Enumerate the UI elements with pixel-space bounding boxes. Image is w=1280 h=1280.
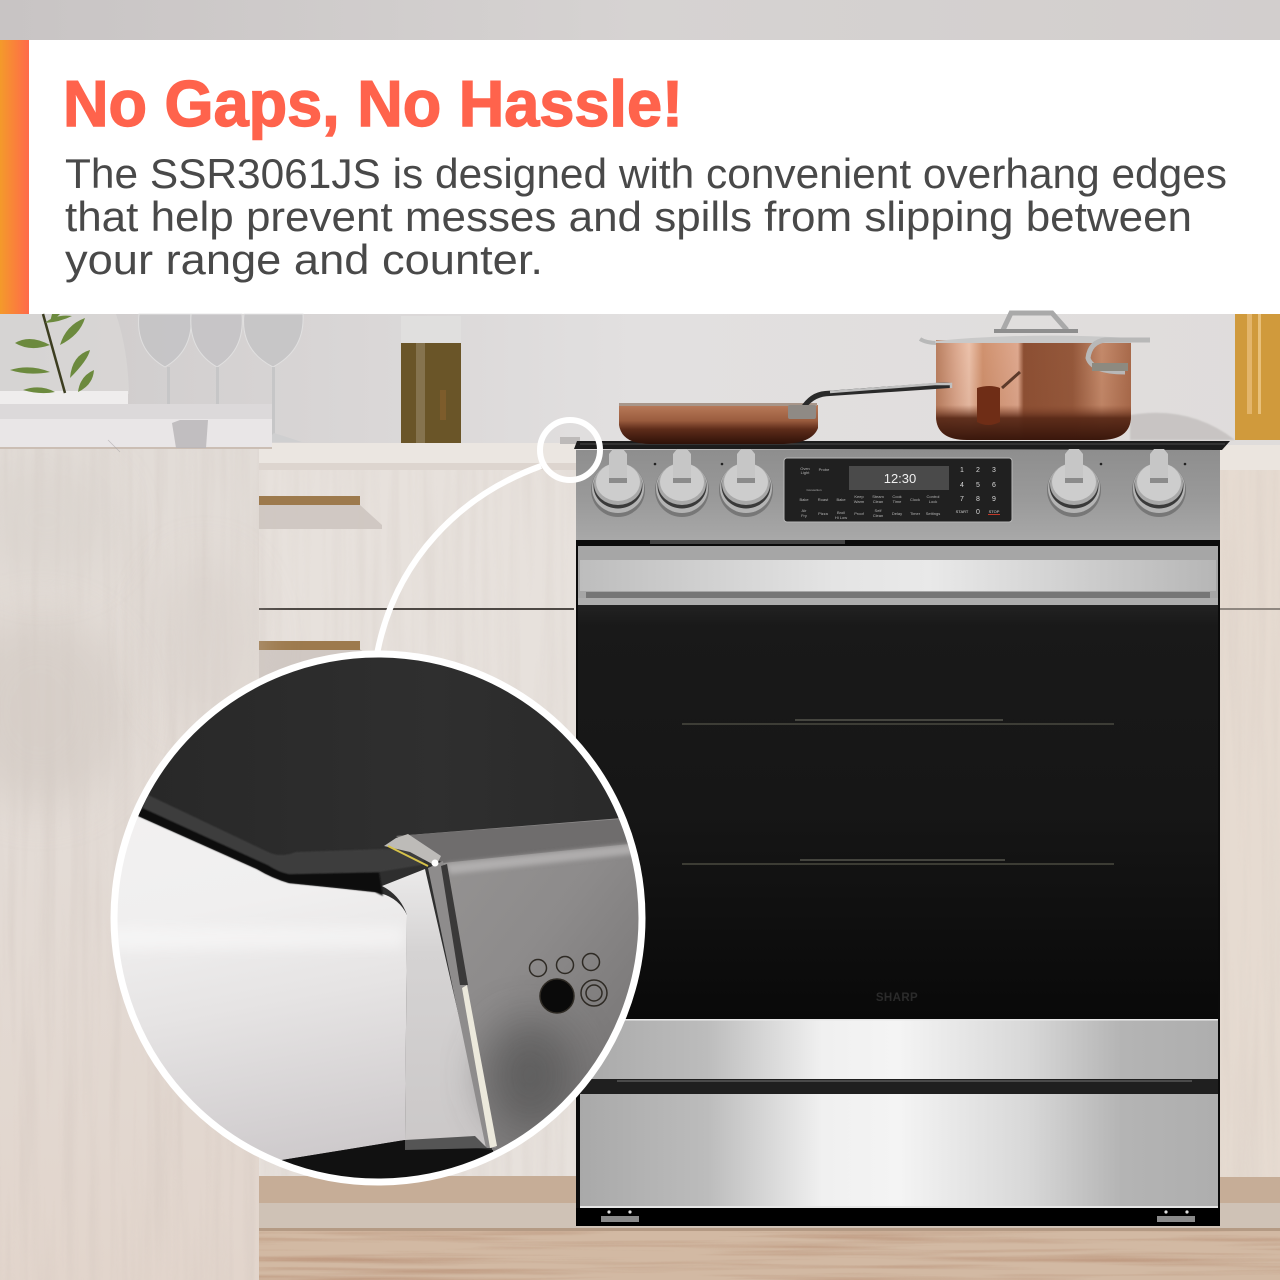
- oven door glass: [578, 605, 1218, 1019]
- black cooktop surface: [138, 658, 619, 1160]
- kitchen scene: [0, 314, 1280, 1280]
- marble strip: [0, 0, 1280, 40]
- keypad: 6: [992, 482, 996, 489]
- header panel: [0, 40, 1280, 314]
- control labels: Air: [802, 508, 807, 513]
- keypad: 5: [976, 482, 980, 489]
- vent holes: [530, 954, 607, 1013]
- middle countertop: [258, 443, 576, 470]
- keypad: 2: [976, 467, 980, 474]
- pan handle: [800, 382, 951, 408]
- brushed steel side: [396, 815, 660, 1155]
- control labels: [799, 466, 940, 520]
- chrome edge: [384, 834, 497, 1148]
- keypad: 7: [960, 496, 964, 503]
- pot reflection: [977, 372, 1020, 425]
- oven rack upper: [682, 720, 1114, 724]
- control labels: Broil: [837, 510, 845, 515]
- frying pan: [619, 382, 951, 444]
- wine glasses: [139, 314, 303, 442]
- pot body: [936, 340, 1131, 440]
- vent gap: [580, 1079, 1218, 1094]
- control labels: Light: [801, 470, 810, 475]
- oven door handle: [578, 540, 1218, 605]
- keypad: 0: [976, 509, 980, 516]
- control labels: Settings: [926, 511, 940, 516]
- control labels: Control: [927, 494, 940, 499]
- connector curve: [377, 466, 541, 654]
- steel drawer: [580, 1094, 1218, 1208]
- display panel: [784, 458, 1012, 522]
- wall: [0, 314, 1280, 454]
- keypad: START: [956, 509, 969, 514]
- drawer handle lower: [258, 641, 382, 690]
- pot: [920, 313, 1150, 440]
- control labels: Timer: [910, 511, 921, 516]
- control labels: Convection: [806, 488, 822, 492]
- control panel: [576, 450, 1220, 542]
- control labels: Oven: [800, 466, 810, 471]
- lens ground: [111, 651, 645, 1185]
- keypad: 1: [960, 467, 964, 474]
- pot handle right: [1088, 340, 1150, 372]
- lid: [935, 336, 1131, 343]
- keypad: [956, 467, 1000, 516]
- metal dark patch: [485, 1020, 575, 1130]
- body text: that help prevent messes and spills from slipping between: [65, 193, 1192, 240]
- pot handle left: [920, 339, 938, 343]
- control labels: Keep: [854, 494, 864, 499]
- control labels: Roast: [818, 497, 829, 502]
- oven rack lower: [682, 860, 1114, 864]
- right cabinet: [1220, 445, 1280, 1177]
- body text: [65, 150, 1227, 283]
- keypad: STOP: [989, 509, 1000, 514]
- keypad: 4: [960, 482, 964, 489]
- knobs: [591, 449, 1186, 517]
- base with feet: [576, 1208, 1220, 1226]
- body text: The SSR3061JS is designed with convenient overhang edges: [65, 150, 1227, 197]
- steel top band: [396, 819, 628, 863]
- brand: SHARP: [876, 992, 918, 1004]
- black base shadow: [282, 1140, 494, 1178]
- range: [560, 437, 1230, 1226]
- pot lid knob: [1003, 313, 1067, 330]
- steel panel upper: [579, 1019, 1218, 1079]
- control labels: Clock: [910, 497, 920, 502]
- cooktop: [560, 437, 1230, 450]
- control labels: Clean: [873, 513, 883, 518]
- magnified detail: [110, 650, 646, 1186]
- control labels: Warm: [854, 499, 865, 504]
- control labels: Bake: [836, 497, 846, 502]
- keypad: 3: [992, 467, 996, 474]
- clock display: [849, 466, 949, 490]
- steel highlight: [447, 842, 630, 875]
- lens ring: [114, 654, 642, 1182]
- control labels: Probe: [819, 467, 830, 472]
- control labels: Self: [875, 508, 882, 513]
- control labels: Bake: [799, 497, 809, 502]
- bottle: [401, 316, 461, 443]
- accent bar: [0, 40, 29, 314]
- control labels: Delay: [892, 511, 902, 516]
- counter side face: [382, 869, 489, 1147]
- control labels: Clean: [873, 499, 883, 504]
- wall shadow: [1130, 413, 1235, 440]
- body frame: [576, 540, 1220, 1226]
- callout ring: [540, 420, 600, 480]
- keypad: 9: [992, 496, 996, 503]
- marble counter slab: [0, 404, 272, 452]
- toe kick: [258, 1176, 1280, 1229]
- left cabinet: [0, 448, 259, 1280]
- counter highlight band: [315, 934, 394, 940]
- drawer handle upper: [258, 496, 382, 529]
- control labels: Cook: [892, 494, 902, 499]
- title: No Gaps, No Hassle!: [63, 67, 683, 140]
- cooktop bevel edge: [143, 794, 430, 874]
- cooktop shadow line: [136, 808, 383, 896]
- control labels: Pizza: [818, 511, 829, 516]
- amber bottle: [1235, 314, 1280, 440]
- control labels: Time: [893, 499, 902, 504]
- control labels: Lock: [929, 499, 937, 504]
- keypad: 8: [976, 496, 980, 503]
- middle cabinet: [258, 470, 576, 1176]
- clock display: 12:30: [884, 471, 916, 486]
- white counter block: [118, 816, 407, 1160]
- control labels: Proof: [854, 511, 865, 516]
- control labels: Steam: [872, 494, 884, 499]
- floor: [258, 1228, 1280, 1280]
- control labels: Fry: [801, 513, 807, 518]
- body text: your range and counter.: [65, 236, 543, 283]
- vase with plant: [0, 314, 129, 405]
- control labels: Hi Low: [835, 515, 847, 520]
